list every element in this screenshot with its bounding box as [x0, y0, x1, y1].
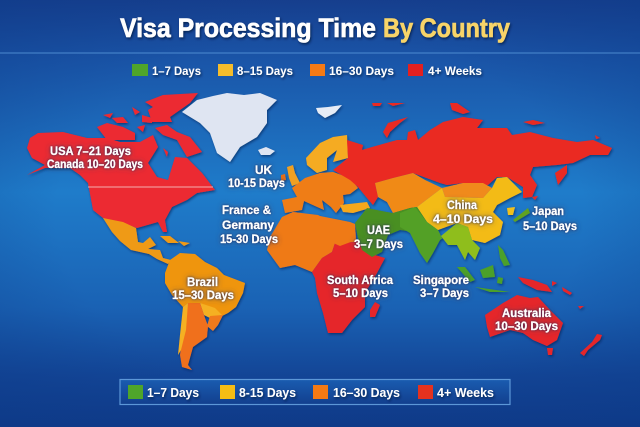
legend item: 4+ weeks: 4+ Weeks: [428, 64, 482, 78]
labels on map: [47, 144, 577, 333]
label: UK: UK: [255, 163, 272, 177]
label: Singapore: Singapore: [413, 273, 469, 287]
region: Indonesia and Philippines: [457, 245, 510, 292]
top legend: [132, 64, 482, 78]
label: South Africa: 5–10 Days: [333, 286, 388, 300]
legend item: 16-30 days: 16–30 Days: [329, 64, 394, 78]
label: UAE: 3–7 Days: [354, 237, 403, 251]
label: Singapore: [413, 273, 469, 300]
legend item: 8-15 days: 8-15 Days: [239, 385, 296, 400]
label: Brazil: 15–30 Days: [172, 288, 234, 302]
label: Japan: [523, 204, 577, 233]
label: Japan: Japan: [532, 204, 564, 218]
legend item: 1-7 days: [132, 64, 201, 78]
label: UK: 10-15 Days: [228, 176, 285, 190]
region: Europe: [281, 135, 358, 213]
region: Russia: [333, 103, 612, 205]
label: China: 4–10 Days: [433, 212, 493, 226]
label: France and Germany: [220, 203, 278, 246]
label: UAE: UAE: [367, 223, 390, 237]
label: France and Germany: 15-30 Days: [220, 232, 278, 246]
label: South Africa: South Africa: [327, 273, 393, 287]
border line across North America: [88, 186, 213, 188]
label: China: China: [447, 198, 477, 212]
bottom legend: [120, 380, 510, 404]
label: Brazil: Brazil: [187, 275, 218, 289]
title: By Country: [383, 13, 510, 43]
region: South America: [165, 253, 245, 370]
label: UK: [228, 163, 285, 190]
label: France and Germany: France &: [222, 203, 271, 217]
region: Svalbard: [316, 105, 342, 118]
label: South Africa: [327, 273, 393, 300]
label: Australia: 10–30 Days: [495, 319, 558, 333]
label: USA and Canada: [47, 144, 143, 171]
region: Mexico and Central America: [103, 218, 190, 264]
legend item: 1-7 days: [128, 385, 199, 400]
region: Mongolia: [442, 183, 492, 198]
region: Southeast Asia: [441, 223, 480, 260]
label: Australia: Australia: [502, 306, 551, 320]
region: China: [417, 177, 522, 243]
label: Australia: [495, 306, 558, 333]
legend item: 4+ weeks: 4+ Weeks: [437, 385, 494, 400]
title: Visa Processing Time: [120, 13, 376, 43]
legend item: 16-30 days: 16–30 Days: [333, 385, 400, 400]
region: Central Asia and Middle East: [320, 173, 442, 246]
legend item: 8-15 days: 8–15 Days: [237, 64, 293, 78]
legend box: [120, 380, 510, 404]
label: Brazil: [172, 275, 234, 302]
region: Canada and USA: [27, 93, 215, 232]
label: Singapore: 3–7 Days: [420, 286, 469, 300]
label: USA and Canada: USA 7–21 Days: [50, 144, 131, 158]
divider: [0, 52, 640, 54]
label: Japan: 5–10 Days: [523, 219, 577, 233]
region: Oceania: [485, 277, 602, 356]
region: Greenland: [182, 93, 277, 162]
region: Africa: [267, 212, 385, 333]
label: USA and Canada: Canada 10–20 Days: [47, 157, 143, 171]
label: UAE: [354, 223, 403, 251]
region: Arabia, Iran, Pakistan: [355, 207, 427, 257]
legend item: 1-7 days: 1–7 Days: [147, 385, 199, 400]
world map: [27, 93, 612, 370]
label: China: [433, 198, 493, 226]
region: India: [400, 207, 450, 263]
label: France and Germany: Germany: [222, 218, 274, 232]
legend item: 1-7 days: 1–7 Days: [152, 64, 201, 78]
region: Korea and Japan: [507, 207, 530, 222]
